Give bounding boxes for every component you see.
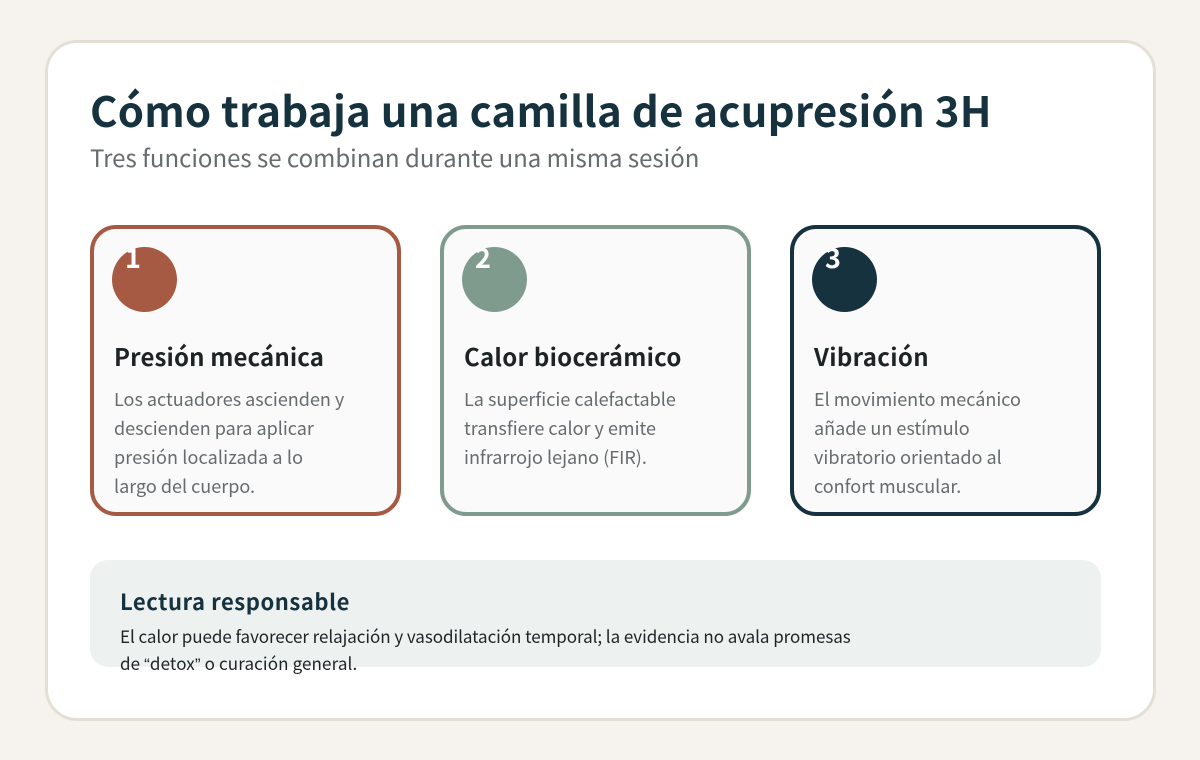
text: confort muscular. bbox=[814, 473, 961, 499]
text bbox=[114, 386, 344, 499]
title: Cómo trabaja una camilla de acupresión 3H bbox=[90, 79, 992, 140]
heading: Calor biocerámico bbox=[464, 338, 682, 373]
callout text: El calor puede favorecer relajación y vasodilatación temporal; la evidencia no avala promesas bbox=[120, 623, 851, 648]
text bbox=[814, 386, 1021, 499]
text: infrarrojo lejano (FIR). bbox=[464, 444, 647, 470]
callout heading: Lectura responsable bbox=[120, 585, 350, 617]
panel: presión mecánica bbox=[90, 225, 401, 516]
icon: number badge 1 bbox=[112, 247, 177, 312]
text: La superficie calefactable bbox=[464, 386, 676, 412]
panel: vibración bbox=[790, 225, 1101, 516]
text: El movimiento mecánico bbox=[814, 386, 1021, 412]
text: largo del cuerpo. bbox=[114, 473, 255, 499]
text: presión localizada a lo bbox=[114, 444, 303, 470]
number 3: 3 bbox=[825, 237, 841, 276]
callout text bbox=[120, 623, 851, 675]
number 1: 1 bbox=[125, 237, 141, 276]
number 2: 2 bbox=[475, 237, 491, 276]
callout text: de “detox” o curación general. bbox=[120, 650, 357, 675]
panel: lectura responsable bbox=[90, 560, 1101, 667]
subtitle: Tres funciones se combinan durante una misma sesión bbox=[90, 139, 699, 174]
heading: Presión mecánica bbox=[114, 338, 324, 373]
text bbox=[464, 386, 676, 470]
panel: calor biocerámico bbox=[440, 225, 751, 516]
text: añade un estímulo bbox=[814, 415, 970, 441]
icon: number badge 3 bbox=[812, 247, 877, 312]
heading: Vibración bbox=[814, 338, 929, 373]
text: transfiere calor y emite bbox=[464, 415, 656, 441]
text: vibratorio orientado al bbox=[814, 444, 1002, 470]
text: Los actuadores ascienden y bbox=[114, 386, 344, 412]
text: descienden para aplicar bbox=[114, 415, 314, 441]
icon: number badge 2 bbox=[462, 247, 527, 312]
